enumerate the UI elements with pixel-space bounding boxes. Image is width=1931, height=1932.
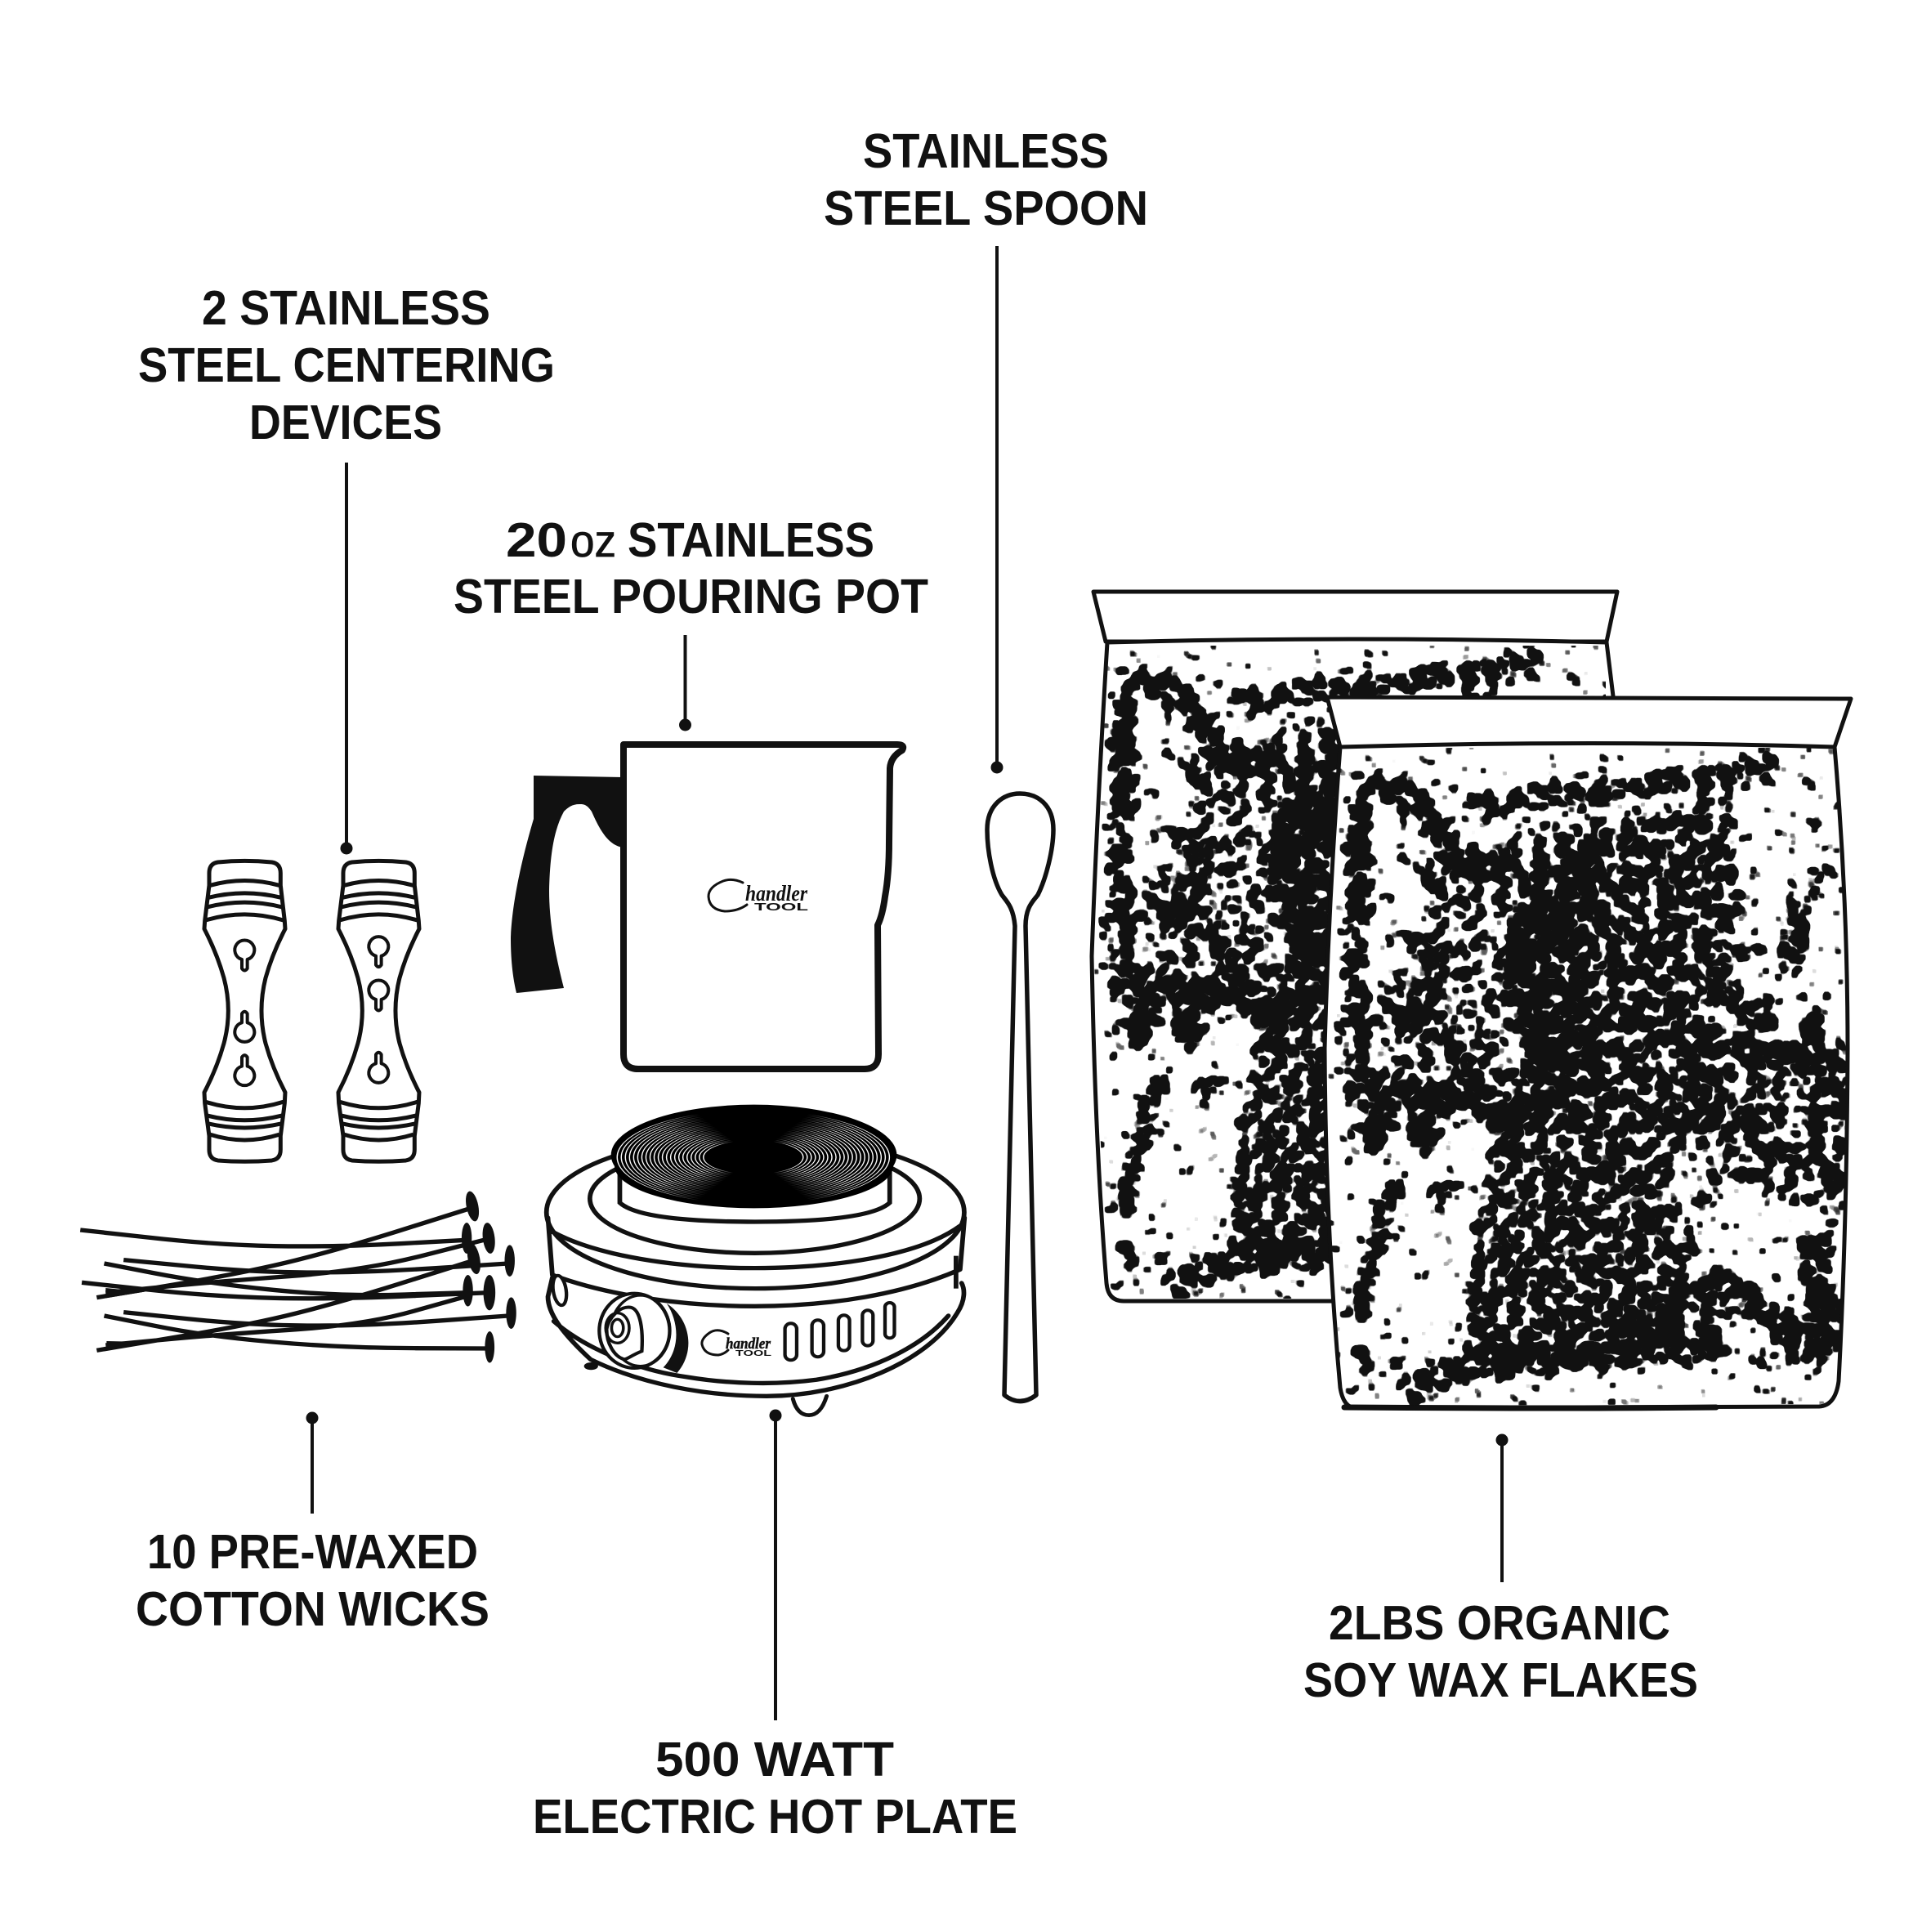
centering device left xyxy=(204,861,285,1161)
leader line: pot xyxy=(679,635,691,731)
inner ring xyxy=(590,1144,919,1253)
pot body xyxy=(624,745,903,1069)
label: hot plate: 500 WATT xyxy=(655,1733,894,1787)
label: stainless steel spoon: STAINLESS xyxy=(863,124,1109,178)
icon: two wick centering devices xyxy=(204,861,419,1161)
front bag flap xyxy=(1327,697,1851,747)
label: soy wax flakes: SOY WAX FLAKES xyxy=(1303,1653,1698,1707)
pot logo xyxy=(708,879,808,913)
icon: pouring pot xyxy=(511,745,903,1069)
right side tab xyxy=(954,1256,959,1289)
label: centering devices: STEEL CENTERING xyxy=(138,338,555,392)
leader line: wicks xyxy=(306,1412,319,1514)
front bag bottom edge xyxy=(1344,1407,1716,1408)
icon: soy wax bag front xyxy=(1325,697,1851,1408)
label: hot plate: ELECTRIC HOT PLATE xyxy=(533,1790,1017,1844)
label: wicks: 10 PRE-WAXED xyxy=(147,1525,478,1579)
wick strands xyxy=(80,1208,508,1350)
side button xyxy=(551,1275,568,1306)
leader line: centering devices xyxy=(340,463,353,855)
neck under burner xyxy=(619,1169,890,1222)
label: soy wax flakes: 2LBS ORGANIC xyxy=(1329,1596,1670,1650)
back bag flakes xyxy=(1111,663,1608,1281)
left foot xyxy=(584,1362,598,1370)
burner concentric rings xyxy=(617,1111,889,1204)
front bag flakes xyxy=(1346,767,1844,1386)
vents xyxy=(785,1303,894,1360)
label: pouring pot: oz xyxy=(570,515,616,566)
hot plate body lines xyxy=(548,1218,964,1396)
label: hot plate xyxy=(533,1733,1017,1844)
leader line: spoon xyxy=(990,246,1003,773)
label: pouring pot: 20 xyxy=(506,513,567,567)
label: centering devices: DEVICES xyxy=(249,396,442,449)
pot logo: TOOL xyxy=(754,901,808,913)
label: centering devices xyxy=(138,281,555,449)
front bag body xyxy=(1325,744,1848,1408)
burner disc xyxy=(611,1105,896,1208)
centering device right xyxy=(338,861,419,1161)
label: pouring pot: STAINLESS xyxy=(628,513,874,567)
label: pouring pot xyxy=(454,513,928,624)
wick tabs xyxy=(462,1190,516,1363)
label: centering devices: 2 STAINLESS xyxy=(202,281,490,335)
pot logo: handler xyxy=(745,881,807,906)
icon: electric hot plate xyxy=(547,1105,964,1415)
label: pouring pot: STEEL POURING POT xyxy=(454,570,928,624)
hot plate logo: TOOL xyxy=(735,1349,771,1358)
label: wicks: COTTON WICKS xyxy=(136,1582,489,1636)
back bag body xyxy=(1092,639,1614,1301)
leader line: hot plate xyxy=(770,1409,781,1720)
icon: cotton wicks xyxy=(80,1190,516,1363)
icon: soy wax bag back xyxy=(1092,592,1617,1301)
back bag flap xyxy=(1093,592,1617,642)
hot plate logo xyxy=(702,1330,771,1358)
pot handle xyxy=(511,776,623,993)
dial knob xyxy=(599,1294,688,1373)
label: soy wax flakes xyxy=(1303,1596,1698,1707)
label: stainless steel spoon: STEEL SPOON xyxy=(824,181,1148,235)
icon: stainless steel spoon xyxy=(987,794,1053,1401)
hot plate outer rim xyxy=(547,1136,964,1289)
hot plate logo: handler xyxy=(726,1335,771,1353)
wick base wedges xyxy=(105,1288,145,1348)
front foot xyxy=(793,1396,827,1415)
label: stainless steel spoon xyxy=(824,124,1148,235)
label: wicks xyxy=(136,1525,489,1636)
leader line: soy wax xyxy=(1495,1433,1509,1582)
